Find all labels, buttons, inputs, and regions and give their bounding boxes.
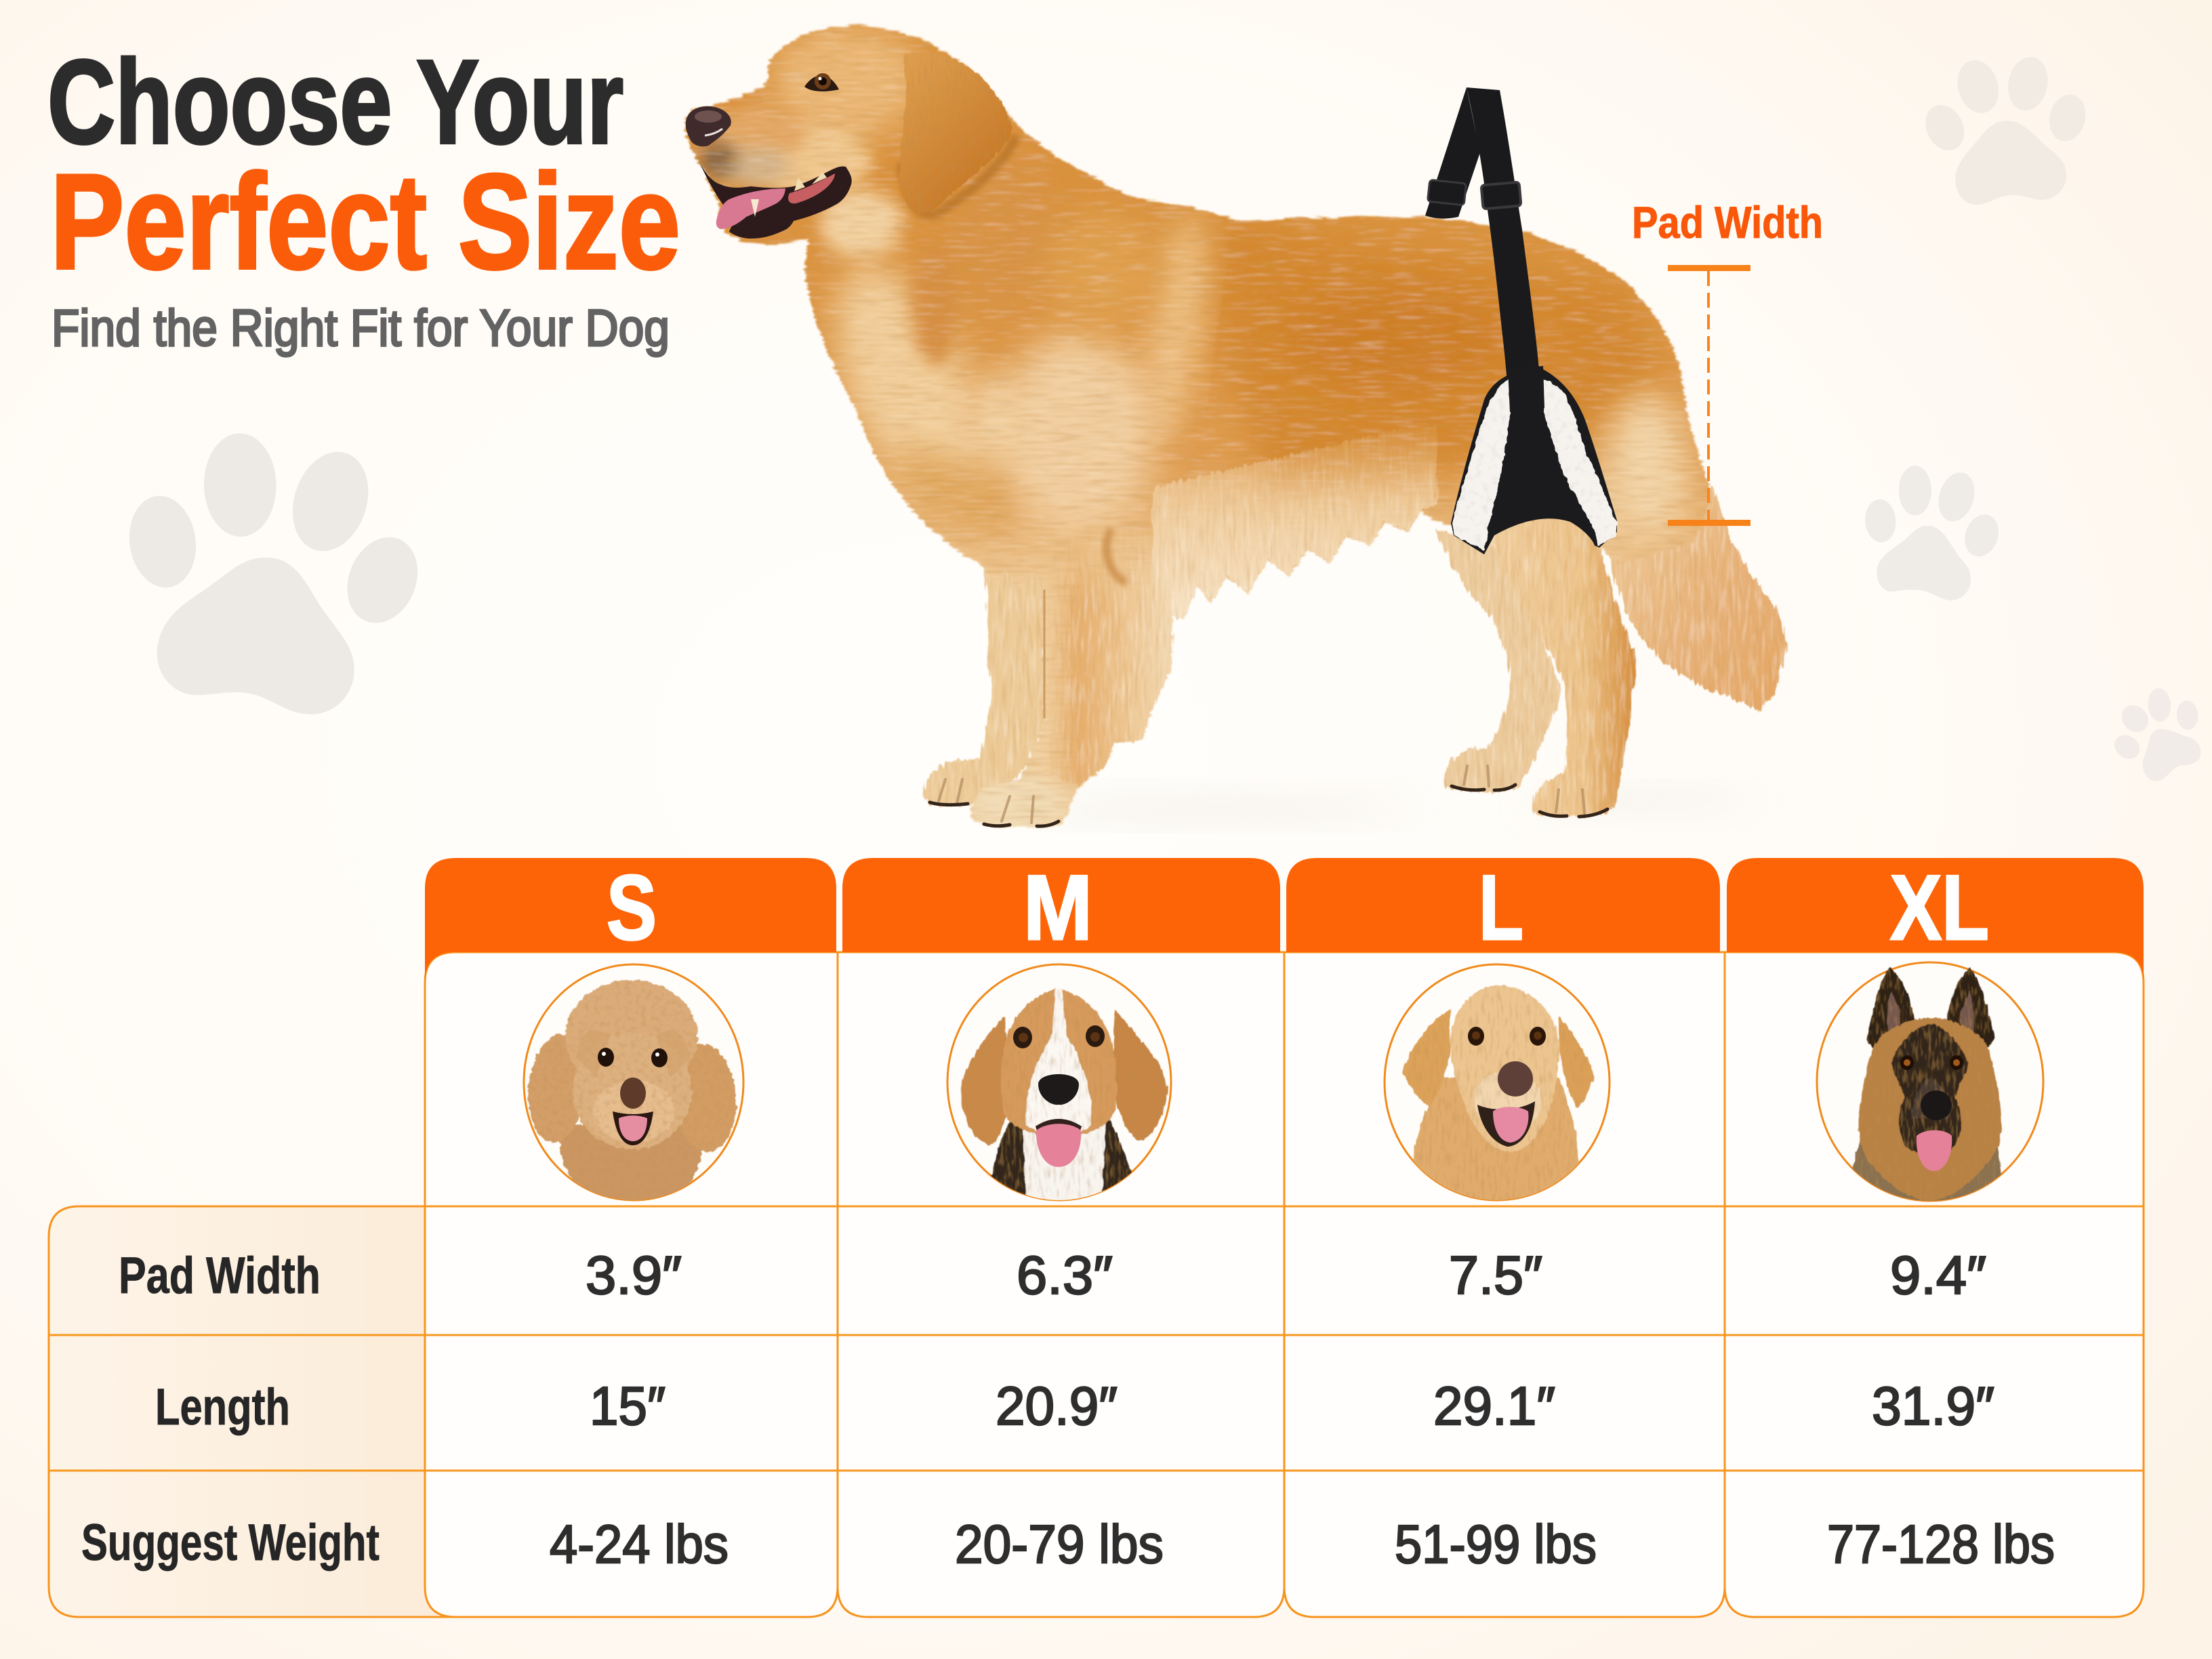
column S	[425, 856, 838, 1617]
suggested weight values: 77-128 lbs	[1827, 1514, 2055, 1574]
length values: 20.9″	[996, 1376, 1118, 1436]
dog portrait: poodle	[524, 964, 743, 1206]
header S	[425, 858, 836, 983]
header letter M: M	[1023, 856, 1092, 959]
near front leg fur	[1047, 529, 1172, 786]
pad width values: 6.3″	[1017, 1245, 1113, 1305]
header M	[842, 858, 1280, 952]
label: suggest weight: Suggest Weight	[81, 1514, 380, 1572]
callout: pad width	[1632, 197, 1823, 526]
elbow fold	[1107, 529, 1126, 583]
harness pad	[1451, 366, 1617, 554]
header XL	[1727, 858, 2144, 983]
tail	[1607, 468, 1786, 713]
far front leg	[923, 559, 1044, 806]
golden retriever with harness	[678, 14, 1786, 840]
header letter S: S	[607, 856, 657, 959]
column XL	[1725, 856, 2144, 1617]
length values	[590, 1376, 1994, 1436]
far rear leg	[1435, 529, 1562, 792]
suggested weight values: 51-99 lbs	[1395, 1514, 1597, 1574]
ear shadow	[901, 136, 1017, 214]
length values: 15″	[590, 1376, 665, 1436]
floor shadow	[1030, 790, 1755, 821]
length values: 31.9″	[1872, 1376, 1994, 1436]
icon: large paw print left	[123, 432, 430, 714]
row label column	[49, 1206, 474, 1617]
paws and claws	[930, 766, 1607, 826]
column L	[1284, 856, 1725, 1617]
pad width label: Pad Width	[1632, 197, 1823, 247]
pad width measure	[1668, 265, 1750, 526]
suggested weight values: 20-79 lbs	[955, 1514, 1164, 1574]
body, neck and head	[678, 14, 1735, 840]
feathered belly fringe	[1152, 420, 1437, 620]
row lines	[49, 1206, 2144, 1471]
harness strap	[1425, 87, 1543, 411]
pad width values	[586, 1245, 1986, 1305]
label: pad width: Pad Width	[119, 1247, 321, 1305]
column M	[838, 856, 1284, 1617]
dog portrait: german shepherd	[1817, 962, 2043, 1213]
size chart table	[49, 856, 2144, 1617]
title line 1: Choose Your	[47, 36, 623, 169]
length values: 29.1″	[1433, 1376, 1555, 1436]
title line 2: Perfect Size	[50, 146, 680, 298]
ear	[899, 52, 1012, 213]
icon: paw print top right	[1924, 52, 2087, 205]
label: length: Length	[155, 1378, 290, 1436]
suggested weight values: 4-24 lbs	[550, 1514, 729, 1574]
pad width values: 7.5″	[1449, 1245, 1542, 1305]
pad width values: 9.4″	[1890, 1245, 1986, 1305]
leg separation line	[1044, 590, 1045, 718]
dog portrait: beagle	[947, 964, 1171, 1206]
icon: paw print middle right	[1864, 466, 2001, 600]
dog portrait: golden retriever	[1385, 964, 1610, 1206]
header letter XL: XL	[1890, 856, 1989, 959]
icon: paw print lower right	[2114, 686, 2200, 781]
near rear leg	[1490, 515, 1636, 817]
title	[47, 36, 680, 357]
suggested weight values	[550, 1514, 2055, 1574]
subtitle: Find the Right Fit for Your Dog	[52, 300, 670, 357]
header L	[1286, 858, 1720, 952]
pad width values: 3.9″	[586, 1245, 682, 1305]
nose	[686, 106, 731, 146]
open mouth	[699, 161, 852, 239]
header letter L: L	[1479, 856, 1523, 959]
eye	[804, 73, 839, 91]
